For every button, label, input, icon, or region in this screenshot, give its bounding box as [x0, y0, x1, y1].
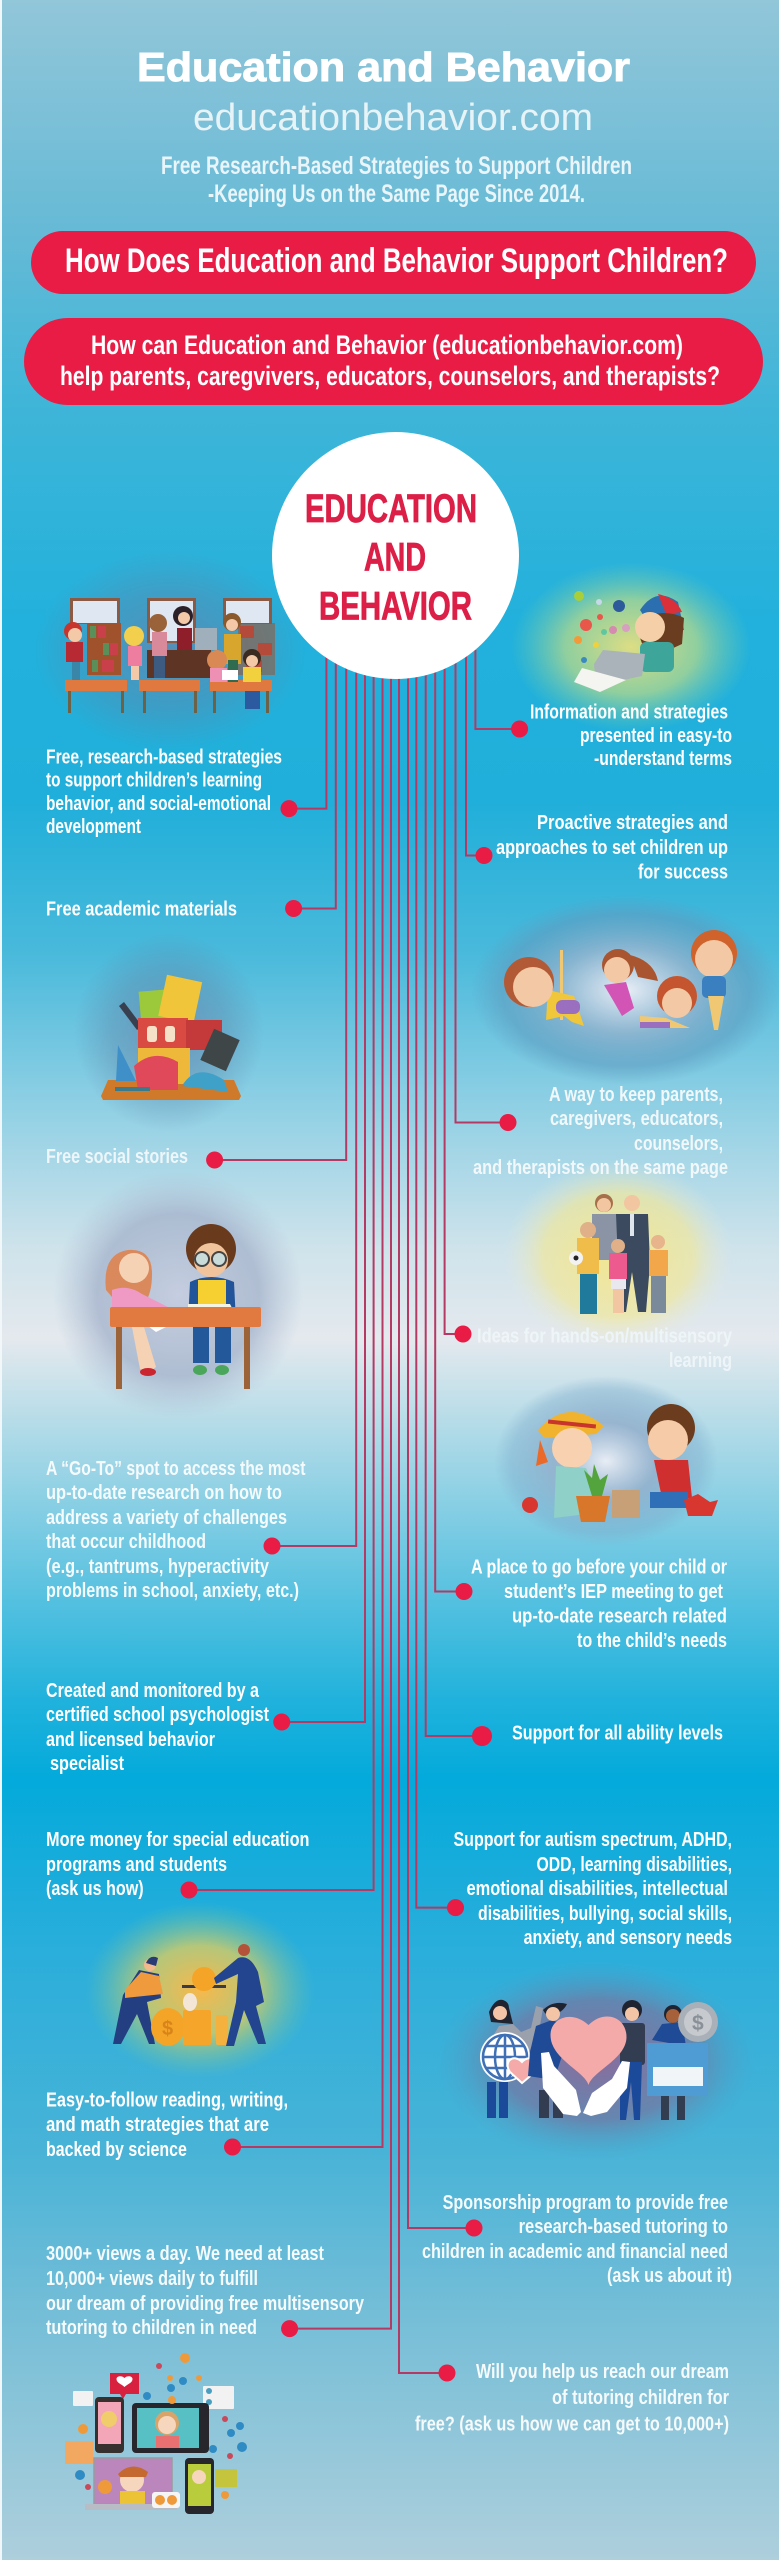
connector end dots [180, 720, 528, 2382]
text: sponsorship program: (ask us about it) [607, 2264, 732, 2287]
text: same page: counselors, [634, 1132, 723, 1155]
text: IEP meeting [471, 1556, 727, 1652]
icon: school bag and books [101, 975, 241, 1100]
subtitle: -Keeping Us on the Same Page Since 2014. [208, 180, 585, 208]
text: views a day [46, 2242, 364, 2339]
text: all ability levels: Support for all ability levels [512, 1722, 723, 1745]
icon: library scene [64, 598, 275, 713]
text: IEP meeting: student’s IEP meeting to get [504, 1580, 723, 1603]
central circle: BEHAVIOR [319, 585, 472, 629]
subtitle [161, 152, 632, 208]
icon: charity people with heart [480, 2000, 718, 2120]
text: proactive strategies: approaches to set children up [496, 836, 728, 859]
text: information and strategies: -understand terms [594, 747, 732, 770]
text: sponsorship program: research-based tutoring to [519, 2215, 728, 2238]
text: more money: programs and students [46, 1853, 227, 1876]
text: easy-to-follow strategies: and math strategies that are [46, 2113, 269, 2136]
text: created and monitored: specialist [50, 1752, 124, 1775]
text: easy-to-follow strategies: backed by science [46, 2138, 187, 2161]
text: proactive strategies [496, 811, 728, 884]
icon: yoga children [504, 930, 737, 1030]
icon: children planting [522, 1404, 718, 1522]
text: will you help [415, 2360, 729, 2436]
icon: social media devices [65, 2353, 247, 2514]
text: views a day: our dream of providing free multisensory [46, 2292, 364, 2315]
text: go-to spot: A “Go-To” spot to access the most [46, 1457, 306, 1480]
text: created and monitored: certified school psychologist [46, 1703, 269, 1726]
banner: question one [31, 231, 756, 294]
connector lines [189, 650, 520, 2373]
icon: children reading at table [105, 1224, 261, 1389]
text: same page: caregivers, educators, [550, 1107, 723, 1130]
central circle [272, 432, 519, 679]
text: easy-to-follow strategies: Easy-to-follow reading, writing, [46, 2088, 288, 2111]
text: views a day: 3000+ views a day. We need at least [46, 2242, 324, 2265]
text: support for autism [454, 1828, 732, 1949]
text: go-to spot [46, 1457, 306, 1602]
text: sponsorship program [422, 2191, 732, 2287]
text: same page [473, 1083, 728, 1179]
text: created and monitored: and licensed behavior [46, 1728, 215, 1751]
text: go-to spot: problems in school, anxiety, etc.) [46, 1579, 299, 1602]
text: will you help: of tutoring children for [552, 2386, 729, 2409]
central circle: AND [364, 536, 426, 580]
central circle: EDUCATION [305, 487, 477, 531]
text: more money: More money for special education [46, 1828, 310, 1851]
title: Education and Behavior [137, 44, 630, 90]
icon: charity people with heart: $ [692, 2012, 704, 2035]
icon: people with coins: $ [162, 2018, 173, 2040]
text: hands-on learning [477, 1325, 732, 1372]
icon: family [569, 1194, 668, 1314]
icon: people with coins [113, 1944, 266, 2046]
website url: educationbehavior.com [193, 97, 593, 139]
text: created and monitored: Created and monitored by a [46, 1679, 259, 1702]
text: go-to spot: up-to-date research on how to [46, 1481, 282, 1504]
text: research-based strategies: to support children’s learning [46, 769, 262, 792]
text: same page: A way to keep parents, [549, 1083, 723, 1106]
children [64, 622, 82, 640]
text: hands-on learning: learning [669, 1349, 732, 1372]
tables [65, 680, 272, 691]
text: go-to spot: address a variety of challenges [46, 1506, 287, 1529]
icon: girl with laptop [574, 591, 684, 692]
text: research-based strategies: development [46, 815, 141, 838]
text: research-based strategies [46, 745, 282, 838]
text: research-based strategies: Free, research-based strategies [46, 745, 282, 768]
text: proactive strategies: for success [638, 861, 728, 884]
text: easy-to-follow strategies [46, 2088, 288, 2161]
text: IEP meeting: to the child’s needs [577, 1629, 727, 1652]
banner: question two [24, 318, 763, 405]
text: academic materials: Free academic materials [46, 898, 237, 921]
text: created and monitored [46, 1679, 269, 1775]
text: views a day: tutoring to children in need [46, 2316, 257, 2339]
subtitle: Free Research-Based Strategies to Support Children [161, 152, 632, 180]
text: go-to spot: (e.g., tantrums, hyperactivity [46, 1555, 269, 1578]
text: information and strategies [530, 701, 732, 770]
text: more money: (ask us how) [46, 1877, 144, 1900]
text: more money [46, 1828, 310, 1900]
text: views a day: 10,000+ views daily to fulfill [46, 2267, 258, 2290]
text: IEP meeting: up-to-date research related [512, 1604, 727, 1628]
text: proactive strategies: Proactive strategies and [537, 811, 728, 834]
glow halos [35, 550, 779, 2160]
text: social stories: Free social stories [46, 1145, 188, 1168]
text: research-based strategies: behavior, and social-emotional [46, 792, 271, 815]
text: information and strategies: presented in easy-to [580, 724, 732, 747]
text: go-to spot: that occur childhood [46, 1530, 206, 1553]
